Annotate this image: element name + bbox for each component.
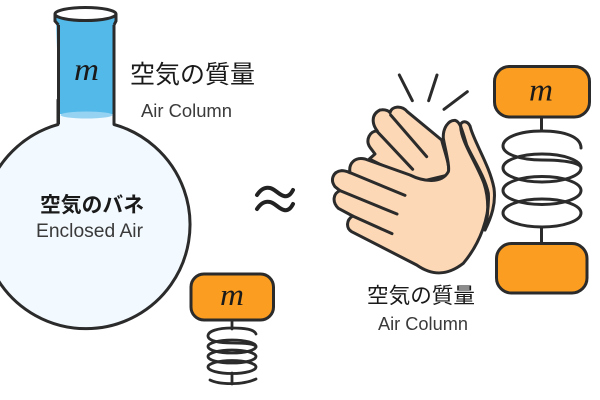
meniscus [60, 112, 112, 118]
neck walls [58, 25, 114, 124]
bottom mass block [496, 244, 587, 293]
mass label in flask: m [74, 51, 99, 87]
finger crease lines [340, 115, 488, 234]
back palm edge [453, 122, 494, 230]
small mass spring [191, 274, 274, 384]
back hand fingers [368, 107, 449, 182]
flask body [0, 100, 190, 329]
heading: air mass: 空気の質量 [130, 61, 255, 89]
flask lip [55, 8, 116, 25]
top mass block [494, 66, 590, 117]
heading: air mass lower: 空気の質量 [367, 284, 475, 308]
spring coil [208, 320, 256, 384]
subheading: air column lower: Air Column [378, 314, 468, 334]
subheading: air column: Air Column [141, 100, 232, 121]
small mass block [191, 274, 274, 320]
small mass label: m [220, 277, 244, 312]
subheading: enclosed air: Enclosed Air [36, 221, 144, 242]
air column fill [56, 16, 115, 114]
clap spark lines [399, 75, 467, 109]
top mass label: m [529, 72, 553, 108]
approximately equal symbol [257, 188, 293, 210]
clapping hands [333, 75, 494, 273]
front hand [333, 120, 489, 273]
heading: air spring: 空気のバネ [40, 194, 144, 217]
large mass spring [494, 66, 590, 293]
large spring coil [503, 117, 581, 243]
flask [0, 8, 190, 329]
